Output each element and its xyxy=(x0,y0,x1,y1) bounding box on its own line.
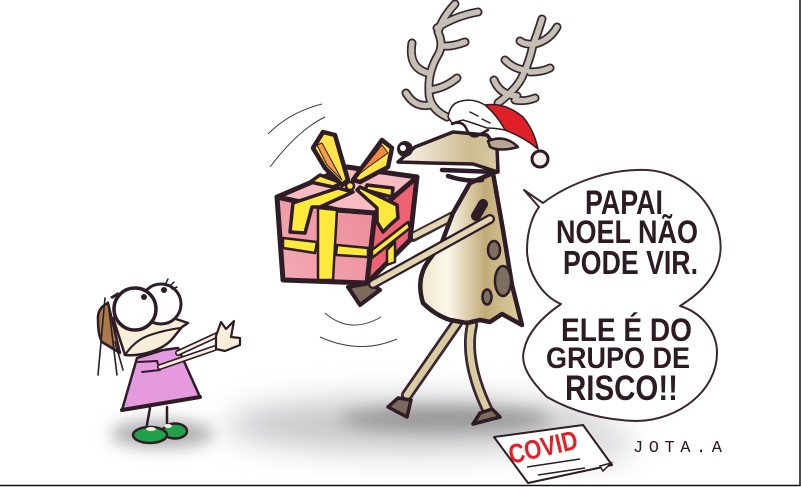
girl xyxy=(98,279,240,443)
hooves xyxy=(388,398,500,424)
dress xyxy=(122,348,200,410)
legs xyxy=(407,323,487,409)
vertical ribbon xyxy=(318,208,337,280)
pupils xyxy=(110,287,167,300)
first message: NOEL NÃO xyxy=(556,214,698,250)
shoes xyxy=(133,424,187,443)
eyelashes xyxy=(165,279,177,289)
box faces xyxy=(277,167,417,283)
hair xyxy=(98,303,120,353)
signature: JOTA.A xyxy=(633,439,723,458)
bow xyxy=(313,132,392,190)
second message: RISCO!! xyxy=(565,369,678,408)
santa hat xyxy=(448,100,548,167)
body xyxy=(420,173,522,325)
motion lines xyxy=(268,104,397,347)
body spots xyxy=(482,241,511,304)
top ribbons xyxy=(290,175,398,233)
face xyxy=(113,300,188,355)
left antler xyxy=(406,4,478,117)
first message: PODE VIR. xyxy=(563,244,698,281)
second message xyxy=(546,312,692,408)
second message: GRUPO DE xyxy=(546,342,690,375)
paper lines xyxy=(527,459,585,475)
head xyxy=(398,132,498,172)
sleeve xyxy=(138,361,160,372)
near eye xyxy=(114,288,156,330)
reindeer xyxy=(388,4,557,424)
back arm xyxy=(413,215,455,237)
paper corner fold xyxy=(600,463,611,471)
side ribbon xyxy=(372,222,410,265)
right antler xyxy=(494,19,557,103)
ground shadows xyxy=(110,398,635,463)
legs xyxy=(146,407,167,430)
far eye xyxy=(141,284,181,324)
first message: PAPAI xyxy=(585,184,663,222)
ear xyxy=(488,139,518,150)
arms xyxy=(160,335,218,367)
hair strands xyxy=(98,298,123,375)
gift box xyxy=(277,132,417,283)
front arm and hoof xyxy=(348,204,490,305)
covid paper xyxy=(494,425,612,483)
first message xyxy=(556,184,698,281)
reindeer hair tuft xyxy=(452,123,488,136)
nose xyxy=(397,141,413,157)
covid label: COVID xyxy=(506,425,581,470)
hands xyxy=(216,321,240,351)
speech bubble xyxy=(523,170,721,421)
second message: ELE É DO xyxy=(561,312,692,348)
horizontal ribbon xyxy=(283,238,368,257)
mouth xyxy=(442,170,496,180)
